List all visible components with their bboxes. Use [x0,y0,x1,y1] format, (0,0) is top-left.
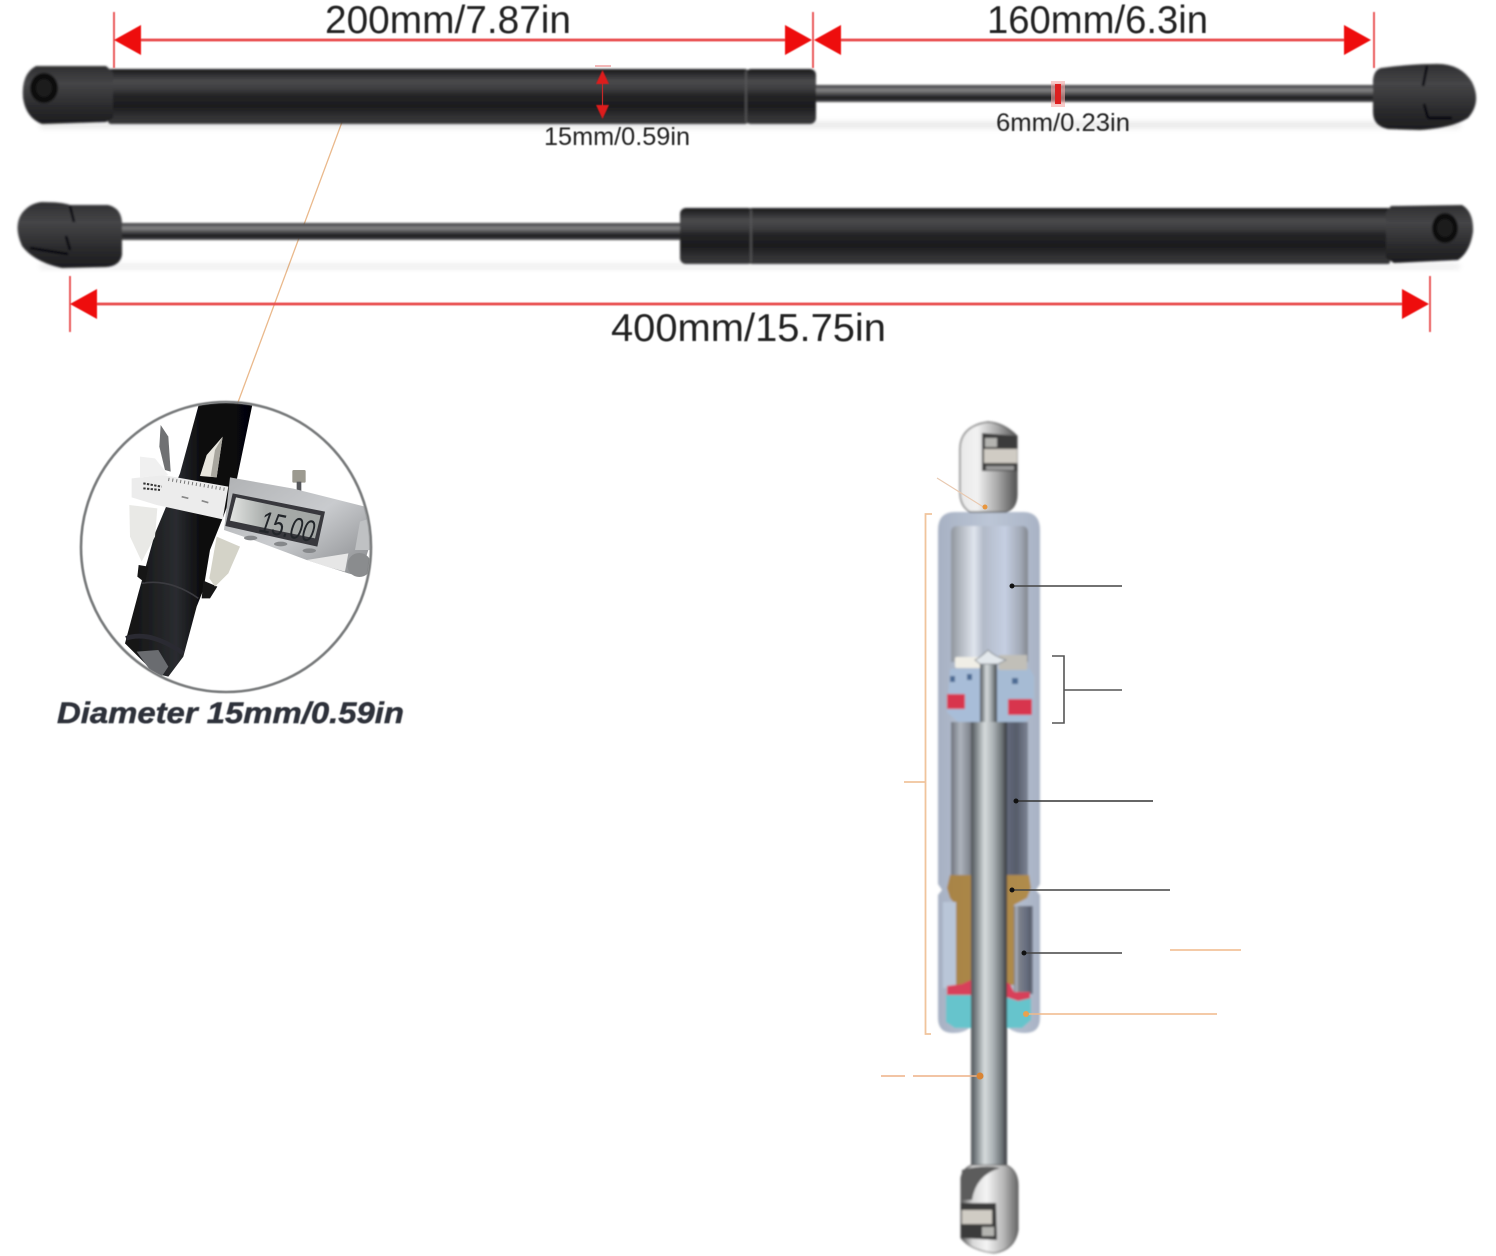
caliper measurement circle [81,400,372,692]
cutaway diagram of gas spring [938,422,1040,1253]
rod [118,223,684,240]
cylinder body [108,69,816,124]
dimension: 160mm: 160mm/6.3in [987,0,1208,42]
bottom chrome eye [961,1165,1018,1253]
caliper scale beam [132,457,228,519]
upper jaw over rod [200,437,223,477]
piston rod tip [137,650,168,677]
right dome cap [1373,64,1476,130]
dimension: 400mm [70,276,1430,350]
digital display frame and LCD: 15.00 [257,505,317,549]
collar ring [126,636,183,653]
brass guide [947,875,1031,985]
caption: diameter: Diameter 15mm/0.59in [57,697,404,730]
rod [812,85,1377,102]
upper gas chamber [951,526,1028,662]
digital display frame and LCD [225,493,325,549]
outer reservoir left [943,902,956,988]
upper gas strut (extended) [23,64,1476,130]
cylinder body [680,208,1390,264]
caliper main body [224,477,372,577]
dimension: 200mm: 200mm/7.87in [325,0,571,42]
dimension: body diameter 15mm [544,66,690,151]
thin piston stem and dome [975,650,1006,724]
clamp tabs [137,565,146,582]
fixed lower jaw [129,505,157,562]
left dome cap [18,202,122,268]
outer cylinder shell [938,512,1040,1033]
dimension: rod diameter 6mm: 6mm/0.23in [996,109,1130,137]
piston rod [971,722,1007,1166]
right eye cap [1386,205,1473,263]
orange leader lines and length bracket [881,478,1241,1080]
dimension: body diameter 15mm: 15mm/0.59in [544,123,690,151]
dimension: 400mm: 400mm/15.75in [611,307,886,350]
lower gas strut (mirrored) [18,202,1473,269]
red seal [947,980,1030,1001]
left eye cap [23,66,113,124]
dimension: 200mm [114,0,812,68]
dimension: 160mm [813,0,1374,68]
lower gas chamber [951,722,1028,880]
sliding lower jaw [209,537,240,587]
black strut in caliper [125,400,253,677]
top chrome eye [960,422,1017,512]
dimension: rod diameter 6mm [996,81,1130,137]
black leader lines and bracket [1010,584,1170,956]
thumb screw [292,470,306,491]
teal end seal [946,995,1031,1028]
outer reservoir right [1014,906,1033,994]
upper caliper jaw behind rod [159,425,171,472]
orange leader line from strut to caliper circle [237,112,348,405]
piston block [947,655,1034,722]
buttons [244,536,316,553]
